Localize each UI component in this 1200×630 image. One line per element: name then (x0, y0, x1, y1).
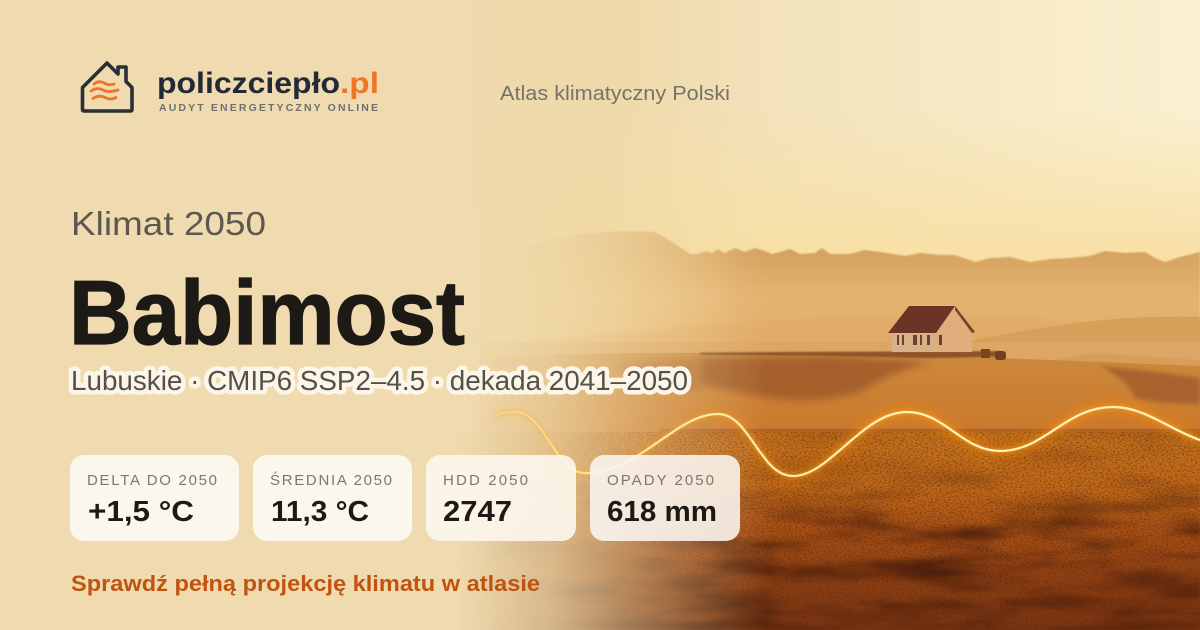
card: opady 2050 (590, 455, 740, 541)
stat cards (70, 455, 740, 541)
icon: house with heat waves (82, 63, 132, 111)
distant hills (500, 316, 1090, 345)
eyebrow: Klimat 2050: Klimat 2050 (71, 205, 266, 242)
card: hdd 2050 (426, 455, 576, 541)
logo wordmark: policzciepło (157, 67, 340, 100)
logo tagline: AUDYT ENERGETYCZNY ONLINE (159, 102, 378, 114)
title: Babimost: Babimost (69, 263, 465, 364)
logo (82, 63, 379, 114)
atlas heading: Atlas klimatyczny Polski (500, 83, 730, 105)
card: opady 2050: 618 mm (607, 496, 717, 528)
card: średnia 2050: ŚREDNIA 2050 (270, 471, 392, 489)
glowing sine wave (495, 407, 1200, 476)
card: hdd 2050: HDD 2050 (443, 472, 528, 489)
background photo scene: farmhouse in golden field (478, 0, 1200, 630)
card: delta do 2050 (70, 455, 239, 541)
card: średnia 2050: 11,3 °C (271, 496, 369, 528)
subtitle with white halo: Lubuskie · CMIP6 SSP2–4.5 · dekada 2041–2050 (71, 365, 688, 396)
card: średnia 2050 (253, 455, 412, 541)
distant treeline (574, 231, 1200, 342)
card: delta do 2050: +1,5 °C (88, 496, 194, 528)
card: opady 2050: OPADY 2050 (607, 472, 714, 489)
rolling dunes (480, 353, 1200, 440)
logo domain suffix: .pl (340, 67, 379, 100)
card: delta do 2050: DELTA DO 2050 (87, 472, 217, 489)
call to action: Sprawdź pełną projekcję klimatu w atlasie (71, 571, 540, 596)
wheat field (400, 432, 1200, 630)
farmhouse (888, 306, 1006, 360)
card: hdd 2050: 2747 (443, 496, 512, 528)
